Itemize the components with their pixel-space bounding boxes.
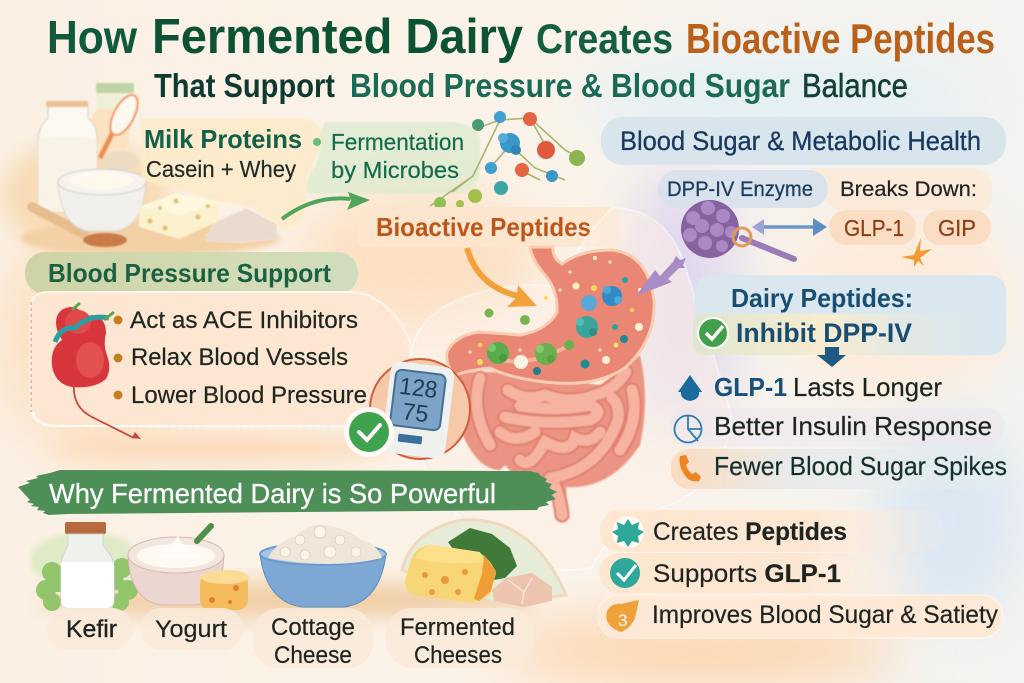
label: bioactive peptides — [358, 207, 620, 247]
label: inhibit DPP-IV: Inhibit DPP-IV — [736, 318, 912, 348]
label: kefir — [47, 608, 133, 650]
arrow: down — [817, 347, 846, 367]
label: GIP — [923, 210, 991, 245]
label: fermented cheeses: Fermented — [400, 614, 515, 641]
title: Fermented Dairy — [152, 10, 523, 64]
label: cottage cheese — [253, 608, 373, 669]
icon: orange split — [901, 238, 932, 267]
label: breaks down: Breaks Down: — [840, 178, 977, 201]
banner: why fermented dairy — [18, 470, 557, 515]
list: blood pressure effects — [114, 307, 367, 409]
icon: check shield — [610, 558, 640, 588]
text: GLP-1 lasts longer — [714, 372, 942, 402]
icon: peptide star — [612, 516, 644, 548]
label: fermented cheeses — [386, 608, 534, 669]
icon: peptide molecule network — [430, 111, 585, 209]
title — [47, 10, 995, 104]
list: blood pressure effects: Lower Blood Pressure — [131, 382, 367, 409]
heading: milk proteins: Milk Proteins — [144, 124, 302, 154]
text: improves blood sugar and satiety: Improves Blood Sugar & Satiety — [652, 601, 998, 629]
title: How — [47, 11, 137, 63]
text: supports GLP-1: Supports GLP-1 — [653, 560, 841, 588]
icon: cottage cheese bowl — [260, 524, 386, 607]
list: blood sugar benefits — [670, 372, 1009, 489]
title: Balance — [802, 67, 908, 104]
title: Blood Pressure & Blood Sugar — [350, 67, 790, 104]
intestines — [452, 355, 645, 522]
panel: fermentation by microbes: Fermentation — [331, 129, 464, 155]
decorative halo behind stomach — [411, 208, 732, 570]
heading: blood sugar and metabolic health — [601, 117, 1006, 165]
list: blood pressure effects: Act as ACE Inhibitors — [130, 307, 358, 334]
icon: blood pressure monitor — [344, 359, 470, 460]
panel: takeaways — [598, 510, 1002, 638]
heading: blood pressure support: Blood Pressure Support — [48, 258, 331, 288]
icon: phone — [680, 455, 701, 481]
label: GIP: GIP — [938, 215, 976, 241]
icon: blood pressure monitor: 75 — [401, 398, 430, 428]
icon: DPP-IV enzyme cluster — [681, 200, 794, 259]
arrow: peptides into stomach — [467, 248, 537, 307]
arrow: proteins to peptides — [282, 192, 370, 219]
label: cottage cheese: Cheese — [274, 642, 352, 669]
text: better insulin response: Better Insulin Response — [714, 411, 992, 441]
label: yogurt — [140, 608, 243, 650]
heading: blood pressure support — [25, 252, 358, 294]
panel: fermentation by microbes: by Microbes — [331, 157, 459, 183]
heading: blood sugar and metabolic health: Blood Sugar & Metabolic Health — [620, 126, 981, 156]
panel: DPP-IV and breakdown — [658, 168, 992, 267]
icon: yogurt bowl — [128, 526, 249, 610]
icon: heart — [52, 303, 141, 439]
text: GLP-1 lasts longer: Lasts Longer — [793, 372, 942, 402]
label: DPP-IV enzyme: DPP-IV Enzyme — [667, 178, 813, 201]
icon: purple arrow into stomach — [636, 256, 686, 296]
illustration: stomach and intestines — [447, 247, 654, 522]
icon: up drop — [678, 375, 702, 401]
text: fewer blood sugar spikes: Fewer Blood Sugar Spikes — [714, 451, 1007, 481]
label: DPP-IV enzyme — [658, 170, 828, 208]
label: fermented cheeses: Cheeses — [414, 642, 502, 669]
arrow: enzyme to GLP-1 — [752, 218, 827, 236]
heading: dairy peptides: Dairy Peptides: — [731, 283, 913, 313]
label: cottage cheese: Cottage — [271, 614, 355, 641]
label: GLP-1 — [829, 210, 916, 245]
text: GLP-1 lasts longer: GLP-1 — [714, 372, 787, 402]
label: yogurt: Yogurt — [155, 616, 227, 643]
label: casein and whey: Casein + Whey — [146, 156, 296, 182]
title: That Support — [154, 67, 335, 104]
panel: fermentation by microbes — [306, 122, 480, 194]
label: GLP-1: GLP-1 — [844, 215, 904, 241]
list: blood pressure effects: Relax Blood Vessels — [131, 344, 348, 371]
icon: badge 3 — [606, 600, 639, 632]
icon: check badge — [698, 318, 728, 348]
icon: milk bottle, bowl, cheeses and spoon — [32, 83, 277, 247]
icon: green check — [344, 407, 394, 457]
icon: kefir bottle — [30, 522, 140, 611]
icon: blood pressure monitor: 128 — [398, 373, 439, 404]
icons: dairy foods row — [30, 520, 566, 669]
panel: blood pressure support — [30, 292, 410, 439]
icon: fermented cheeses — [402, 520, 566, 607]
stomach — [447, 247, 654, 383]
title: Creates — [536, 15, 673, 62]
peptide particles — [468, 256, 643, 375]
icon: clock chart — [674, 415, 702, 442]
panel: dairy peptides — [693, 275, 1006, 367]
text: creates peptides: Creates Peptides — [653, 518, 847, 546]
banner: why fermented dairy: Why Fermented Dairy is So Powerful — [49, 478, 496, 509]
icon: badge 3: 3 — [618, 611, 627, 630]
panel: milk proteins — [140, 118, 322, 228]
label: kefir: Kefir — [66, 616, 117, 643]
label: bioactive peptides: Bioactive Peptides — [376, 212, 591, 242]
